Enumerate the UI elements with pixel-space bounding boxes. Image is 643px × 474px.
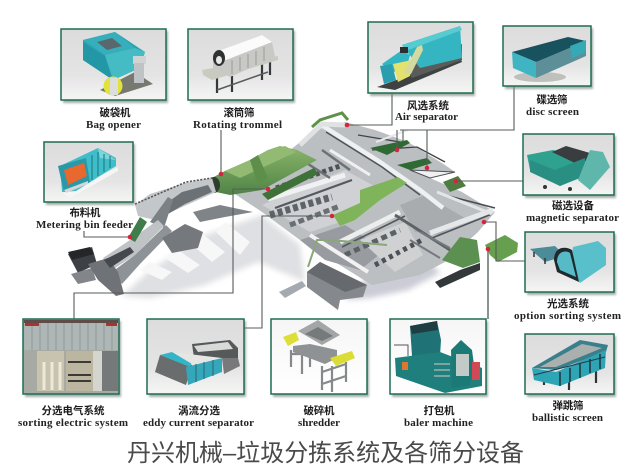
panel: baler machine (390, 319, 488, 397)
label: eddy current separator (143, 404, 254, 429)
grey building (307, 262, 367, 310)
label: shredder: shredder (298, 417, 340, 429)
label: disc screen: 碟选筛 (536, 93, 568, 106)
label: baler machine: baler machine (404, 417, 473, 429)
icon: baler machine (394, 321, 482, 393)
label: air separator: 风选系统 (407, 99, 450, 112)
label: option sorting system: 光选系统 (547, 297, 590, 310)
connector lines and red markers (74, 86, 525, 328)
label: shredder: 破碎机 (304, 404, 335, 417)
panel: disc screen (503, 26, 593, 89)
panel: metering bin feeder (44, 142, 135, 205)
ground shadows (122, 215, 440, 300)
belts and beams (268, 124, 495, 272)
title: 丹兴机械–垃圾分拣系统及各筛分设备 (127, 440, 524, 467)
label: shredder (298, 404, 340, 429)
label: ballistic screen: 弹跳筛 (552, 399, 584, 412)
label: sorting electric system (18, 404, 128, 429)
dark conveyor (435, 263, 480, 288)
label: option sorting system: option sorting system (514, 310, 621, 322)
icon: trommel machine (202, 35, 278, 93)
left platform and incline (135, 178, 216, 220)
panel: bag opener (61, 29, 168, 103)
label: bag opener: 破袋机 (100, 106, 131, 119)
main deck (232, 122, 495, 285)
panel: option sorting system (525, 232, 616, 295)
panel: eddy current separator (147, 319, 246, 397)
panel: shredder (271, 319, 369, 397)
panel: sorting electric system (23, 319, 121, 397)
label: disc screen (526, 93, 579, 118)
label: rotating trommel: Rotating trommel (193, 119, 282, 131)
label: ballistic screen: ballistic screen (532, 412, 603, 424)
icon: eddy current separator machine (155, 340, 240, 385)
panel: magnetic separator (523, 134, 616, 198)
icon: bag opener machine (83, 32, 153, 96)
label: air separator (395, 99, 458, 123)
label: magnetic separator: magnetic separator (526, 212, 619, 224)
icon: disc screen machine (512, 37, 586, 82)
label: eddy current separator: eddy current separator (143, 417, 254, 429)
central sorting plant (68, 113, 518, 310)
label: ballistic screen (532, 399, 603, 424)
label: rotating trommel (193, 106, 282, 131)
label: sorting electric system: sorting electric system (18, 417, 128, 429)
label: magnetic separator: 磁选设备 (552, 199, 594, 212)
panel: air separator (368, 22, 475, 96)
label: air separator: Air separator (395, 111, 458, 123)
panel: ballistic screen (525, 334, 616, 397)
icon: optical sorter machine (530, 241, 606, 283)
label: metering bin feeder (36, 206, 133, 231)
label: bag opener: Bag opener (86, 119, 141, 131)
green conveyors (333, 140, 518, 268)
icon: ballistic screen machine (532, 340, 608, 390)
icon: air separator machine (377, 26, 462, 90)
label: sorting electric system: 分选电气系统 (42, 404, 105, 417)
icon: magnetic separator machine (527, 146, 610, 191)
label: disc screen: disc screen (526, 106, 579, 118)
icon: electric cabinet photo (24, 320, 118, 393)
label: bag opener (86, 106, 141, 131)
panel: rotating trommel (188, 29, 295, 103)
label: magnetic separator (526, 199, 619, 224)
label: rotating trommel: 滚筒筛 (224, 106, 254, 119)
icon: feeder machine (58, 148, 118, 198)
green trommel (208, 146, 318, 200)
label: metering bin feeder: Metering bin feeder (36, 219, 133, 231)
icon: shredder machine (283, 320, 355, 392)
label: baler machine (404, 404, 473, 429)
label: baler machine: 打包机 (424, 404, 455, 417)
label: option sorting system (514, 297, 621, 322)
label: metering bin feeder: 布料机 (70, 206, 101, 219)
label: eddy current separator: 涡流分选 (178, 404, 220, 417)
